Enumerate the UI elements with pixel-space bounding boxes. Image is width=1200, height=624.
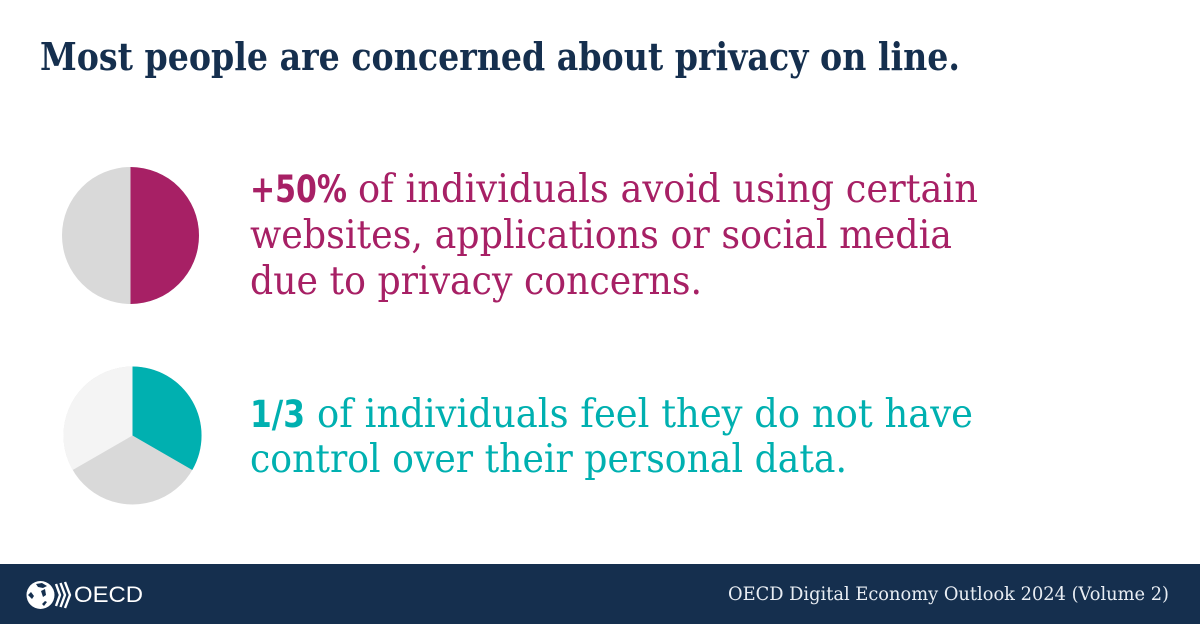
text block: +50% of individuals: +50% — [250, 168, 347, 211]
text block: +50% of individuals: due to privacy concerns. — [250, 259, 702, 304]
text block: 1/3 of individuals: control over their personal data. — [250, 437, 847, 482]
footer bar — [0, 564, 1200, 624]
title: Most people are concerned about privacy on line. — [40, 34, 960, 79]
text block: +50% of individuals: of individuals avoid using certain — [358, 167, 978, 212]
icon: globe — [26, 581, 54, 609]
source: OECD Digital Economy Outlook 2024 (Volume 2) — [728, 583, 1169, 605]
pie chart: more than 50 percent — [62, 167, 199, 304]
text block: +50% of individuals: websites, applications or social media — [250, 213, 952, 258]
text block: 1/3 of individuals: 1/3 — [250, 393, 305, 436]
text block: +50% of individuals — [250, 167, 978, 304]
pie chart: one third — [63, 366, 202, 504]
OECD logo — [26, 581, 143, 609]
logo wordmark: OECD — [74, 582, 143, 607]
icon: chevrons — [56, 582, 70, 608]
text block: 1/3 of individuals — [250, 392, 973, 482]
text block: 1/3 of individuals: of individuals feel they do not have — [317, 392, 973, 437]
